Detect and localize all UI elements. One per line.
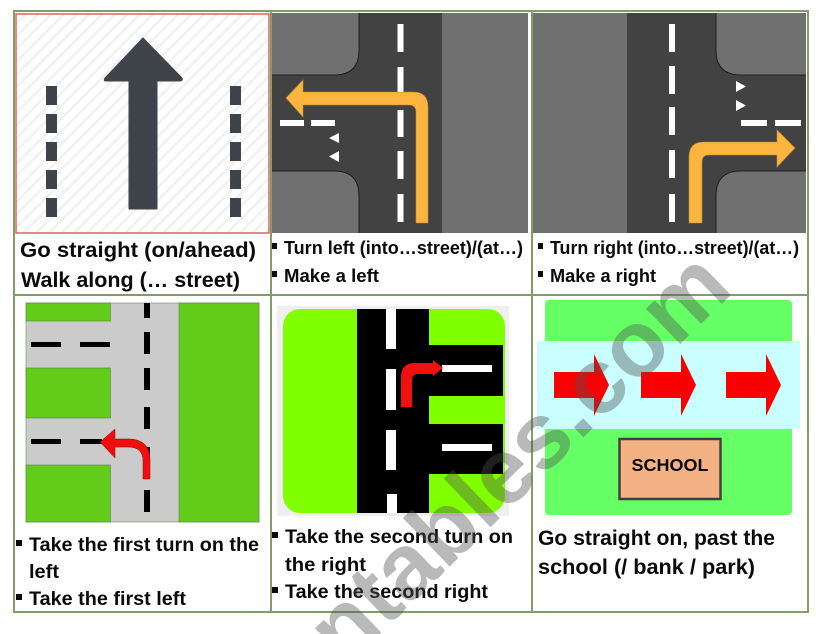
icon: right turn road diagram — [533, 13, 806, 233]
text: turn right caption: Make a right — [550, 266, 656, 286]
icon: past the school map — [537, 300, 800, 515]
text: first left caption: left — [29, 562, 60, 583]
text: second right caption: the right — [285, 555, 367, 576]
arrow: red straight 3 — [726, 354, 781, 416]
arrow: right turn — [689, 130, 795, 223]
school building — [620, 439, 720, 499]
school building: SCHOOL — [632, 455, 709, 475]
text: first left caption: Take the first turn on the — [29, 535, 259, 556]
panel: first left — [16, 303, 259, 610]
icon: straight arrow with dashed lanes — [16, 14, 269, 233]
arrow: red straight 1 — [554, 354, 609, 416]
text: second right caption: Take the second right — [285, 582, 489, 603]
panel: turn left — [272, 13, 528, 286]
text: turn left caption: Make a left — [284, 266, 379, 286]
arrow: red right turn — [401, 360, 443, 407]
text: go straight caption: Go straight (on/ahead) — [20, 239, 256, 262]
panel: second right — [272, 306, 513, 603]
text: go straight caption — [20, 239, 256, 292]
panel: past the school — [537, 300, 800, 579]
text: turn right caption: Turn right (into…street)/(at…) — [550, 238, 799, 258]
icon: left turn road diagram — [272, 13, 528, 233]
text: second right caption: Take the second turn on — [285, 527, 513, 548]
arrow: red straight 2 — [641, 354, 696, 416]
text: second right caption — [272, 527, 513, 603]
icon: second right road map — [277, 306, 509, 516]
text: past the school caption: Go straight on, past the — [538, 527, 775, 550]
text: first left caption: Take the first left — [29, 589, 187, 610]
icon: first left road map — [26, 303, 259, 522]
text: past the school caption: school (/ bank / park) — [538, 556, 755, 579]
panel: go straight — [16, 14, 269, 292]
arrow: left turn — [286, 80, 428, 223]
text: turn left caption — [272, 238, 523, 286]
text: past the school caption — [538, 527, 775, 579]
arrow: red left turn — [100, 429, 150, 479]
text: turn left caption: Turn left (into…street)/(at…) — [284, 238, 523, 258]
panel: turn right — [533, 13, 806, 286]
text: turn right caption — [538, 238, 799, 286]
text: first left caption — [16, 535, 259, 610]
text: go straight caption: Walk along (… street) — [21, 269, 240, 292]
